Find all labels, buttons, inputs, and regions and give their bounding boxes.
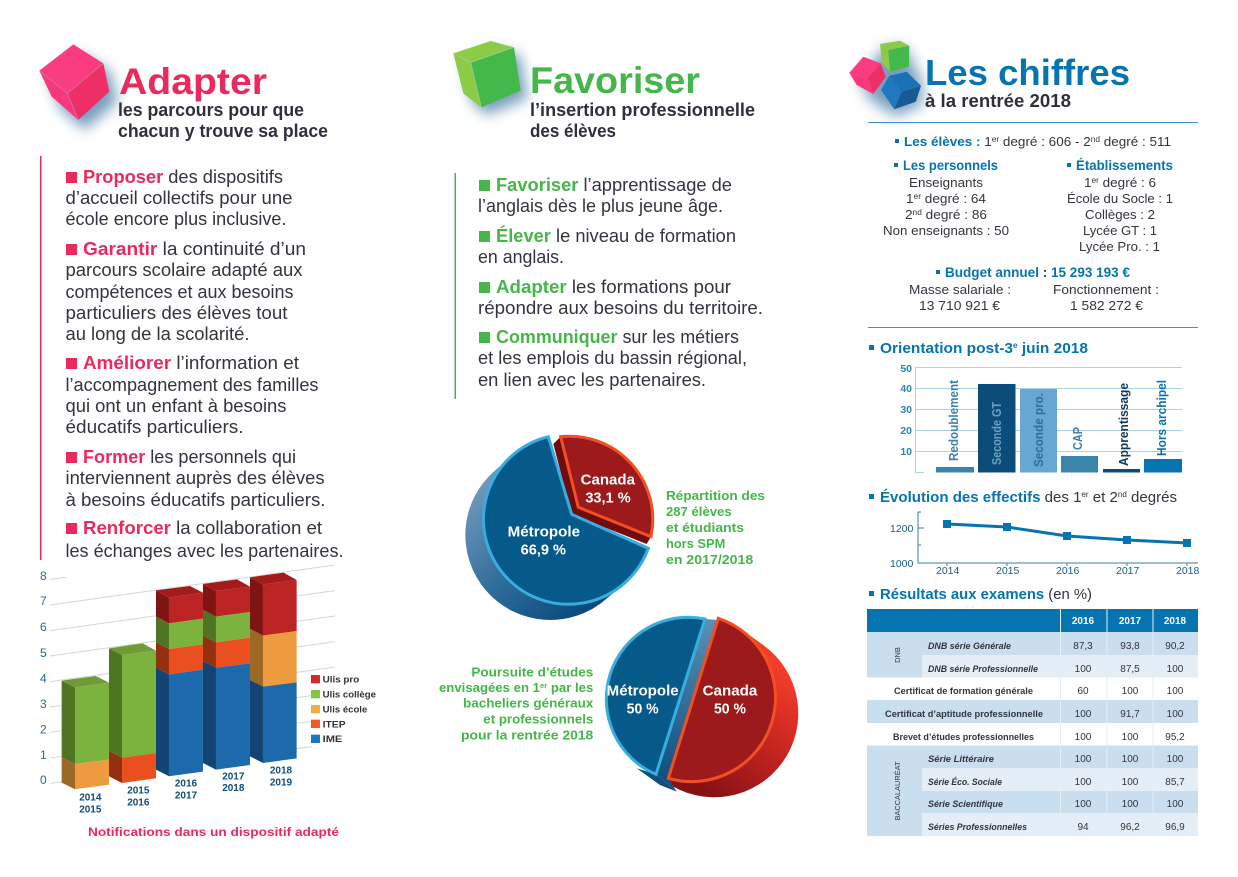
- legend: Ulis école: [323, 705, 367, 715]
- stat: budget annuel: 1 582 272 €: [1070, 298, 1144, 313]
- bar 2018-2019: [250, 573, 297, 763]
- line chart: effectifs: 1200: [890, 523, 914, 535]
- heading: Adapter: Adapter: [119, 61, 267, 102]
- icon: pink cube: [39, 44, 117, 130]
- table: résultats: 100: [1075, 777, 1092, 788]
- axis labels: [40, 569, 47, 787]
- table: résultats: 100: [1122, 732, 1139, 743]
- caption: poursuite d'études: par les: [547, 681, 593, 695]
- legend: ITEP: [323, 719, 346, 729]
- bar 2014-2015: [62, 676, 109, 789]
- caption: poursuite d'études: Poursuite d’études: [471, 666, 593, 680]
- stat: les personnels: degré : 64: [921, 191, 986, 206]
- bar 2016-2017: [156, 586, 203, 776]
- caption: poursuite d'études: envisagées en 1: [439, 681, 536, 695]
- table: résultats: 100: [1167, 709, 1184, 720]
- pie chart: Métropole 66,9 %, Canada 33,1 %: 66,9 %: [521, 542, 566, 559]
- table: résultats: Série Scientifique: [928, 799, 1004, 810]
- pie chart: Métropole 50 %, Canada 50 %: 50 %: [627, 700, 659, 717]
- subtitle: adapter: [118, 100, 328, 141]
- stat: budget annuel: Budget annuel : 15 293 193 €: [945, 264, 1130, 280]
- caption: répartition: [666, 489, 765, 567]
- stat: établissements: 1: [1084, 175, 1091, 190]
- year labels: 2018: [270, 766, 293, 777]
- text block: adapter actions: au long de la scolarité.: [66, 324, 250, 344]
- table: résultats: 87,3: [1073, 641, 1093, 652]
- table: résultats: 100: [1075, 754, 1092, 765]
- stat: budget annuel: Masse salariale :: [909, 282, 1011, 297]
- caption: répartition: hors SPM: [666, 537, 725, 551]
- stat: les élèves: nd: [1091, 135, 1100, 144]
- heading: orientation: Orientation post-3: [880, 340, 1009, 357]
- stat: budget annuel: Fonctionnement :: [1053, 282, 1159, 297]
- text block: favoriser actions: l’anglais dès le plus jeune âge.: [478, 196, 723, 216]
- subtitle: favoriser: l’insertion professionnelle: [530, 100, 755, 120]
- table: résultats: 60: [1077, 686, 1089, 697]
- year labels: 2017: [222, 772, 245, 783]
- text block: adapter actions: éducatifs particuliers.: [66, 417, 244, 437]
- text block: adapter actions: à besoins éducatifs particuliers.: [66, 490, 326, 510]
- text block: adapter actions: Garantir la continuité d’un: [83, 239, 306, 259]
- axis labels: 0: [40, 773, 47, 787]
- table: résultats: Série Littéraire: [928, 754, 995, 765]
- pie chart: Métropole 50 %, Canada 50 %: 50 %: [714, 700, 746, 717]
- axis labels: 6: [40, 620, 47, 634]
- table: résultats: 100: [1122, 686, 1139, 697]
- stat: les personnels: 1: [906, 191, 913, 206]
- text block: adapter actions: interviennent auprès des élèves: [66, 468, 324, 488]
- heading: évolution des effectifs: Évolution des effectifs des 1: [880, 489, 1081, 506]
- heading: évolution des effectifs: et 2: [1089, 489, 1118, 506]
- stat: établissements: Lycée Pro. : 1: [1079, 239, 1160, 254]
- table: résultats: 93,8: [1120, 641, 1140, 652]
- text block: adapter actions: l’accompagnement des familles: [66, 375, 318, 395]
- table: résultats: 100: [1167, 686, 1184, 697]
- table: résultats: 95,2: [1165, 732, 1185, 743]
- stat: budget annuel: 13 710 921 €: [919, 298, 1001, 313]
- stat: les personnels: nd: [913, 208, 922, 217]
- bar chart: orientation: 30: [900, 404, 912, 416]
- table: résultats: Certificat de formation générale: [894, 686, 1033, 697]
- icon: green cube: [453, 41, 527, 115]
- axis labels: 4: [40, 671, 47, 685]
- text block: favoriser actions: en anglais.: [478, 247, 564, 267]
- table: résultats: 100: [1122, 754, 1139, 765]
- stat: établissements: degré : 6: [1099, 175, 1156, 190]
- year labels: 2015: [127, 786, 150, 797]
- table: résultats: 96,2: [1120, 822, 1140, 833]
- caption: poursuite d'études: [439, 666, 593, 742]
- table: résultats: Série Éco. Sociale: [928, 777, 1003, 788]
- table: résultats: 100: [1167, 754, 1184, 765]
- stat: les personnels: er: [914, 192, 921, 201]
- table: résultats: Certificat d’aptitude professionnelle: [885, 709, 1043, 720]
- text block: adapter actions: parcours scolaire adapté aux: [66, 260, 302, 280]
- table: résultats: 100: [1075, 709, 1092, 720]
- stat: budget annuel: [909, 264, 1159, 313]
- stat: les personnels: degré : 86: [922, 207, 987, 222]
- legend: IME: [323, 734, 342, 744]
- caption: répartition: en 2017/2018: [666, 553, 753, 567]
- subtitle: favoriser: [530, 100, 755, 141]
- table: résultats: 100: [1075, 664, 1092, 675]
- line chart: effectifs: [890, 512, 1200, 577]
- year labels: 2015: [79, 805, 102, 816]
- text block: favoriser actions: [454, 173, 763, 399]
- heading: résultats aux examens: Résultats aux examens (en %): [880, 586, 1092, 603]
- stat: les personnels: 2: [905, 207, 912, 222]
- axis labels: 1: [40, 748, 47, 762]
- stat: établissements: er: [1092, 176, 1099, 185]
- legend: Ulis collège: [323, 690, 376, 700]
- stat: les personnels: [883, 157, 1009, 238]
- caption: poursuite d'études: er: [540, 681, 547, 690]
- table: résultats: BACCALAURÉAT: [893, 761, 902, 820]
- table: résultats: [867, 609, 1198, 836]
- table: résultats: 100: [1075, 732, 1092, 743]
- bar chart: orientation: 20: [900, 425, 912, 437]
- table: résultats: DNB série Générale: [928, 641, 1012, 652]
- line chart: effectifs: 2015: [996, 565, 1020, 577]
- year labels: 2019: [270, 778, 293, 789]
- stat: établissements: École du Socle : 1: [1067, 191, 1173, 206]
- bar chart: orientation: Apprentissage: [1117, 383, 1131, 466]
- year labels: 2016: [127, 798, 150, 809]
- stat: les personnels: Non enseignants : 50: [883, 223, 1009, 238]
- text block: adapter actions: Renforcer la collaboration et: [83, 518, 322, 538]
- text block: adapter actions: Former les personnels qui: [83, 447, 296, 467]
- bar chart: orientation: CAP: [1071, 427, 1085, 450]
- stat: établissements: Établissements: [1076, 157, 1173, 173]
- table: résultats: 94: [1077, 822, 1089, 833]
- table: résultats: 91,7: [1120, 709, 1140, 720]
- table: résultats: DNB: [893, 647, 902, 663]
- bar 2015-2016: [109, 643, 156, 783]
- axis labels: 5: [40, 646, 47, 660]
- table: résultats: 87,5: [1120, 664, 1140, 675]
- text block: adapter actions: Améliorer l’information et: [83, 353, 299, 373]
- pie chart: Métropole 66,9 %, Canada 33,1 %: [483, 420, 670, 604]
- legend: [311, 675, 376, 744]
- line chart: effectifs: 1000: [890, 558, 914, 570]
- bar chart: orientation: [900, 363, 1182, 472]
- legend: Ulis pro: [323, 675, 360, 685]
- text block: adapter actions: [40, 156, 344, 561]
- table: résultats: 100: [1167, 799, 1184, 810]
- axis labels: 7: [40, 594, 47, 608]
- bar chart: orientation: 10: [900, 446, 912, 458]
- text block: favoriser actions: en lien avec les partenaires.: [478, 370, 706, 390]
- bar chart: orientation: Seconde GT: [990, 402, 1004, 465]
- table: résultats: 2017: [1119, 616, 1142, 627]
- heading: évolution des effectifs: degrés: [1127, 489, 1177, 506]
- table: résultats: 100: [1167, 664, 1184, 675]
- table: résultats: 100: [1122, 799, 1139, 810]
- subtitle: adapter: chacun y trouve sa place: [118, 121, 328, 141]
- stat: établissements: [1067, 157, 1173, 254]
- pie chart: Métropole 50 %, Canada 50 %: [606, 617, 775, 792]
- text block: favoriser actions: Communiquer sur les métiers: [496, 327, 739, 347]
- text block: favoriser actions: et les emplois du bassin régional,: [478, 348, 747, 368]
- panel: favoriser: [439, 41, 775, 792]
- caption: répartition: Répartition des: [666, 489, 765, 503]
- table: résultats: Séries Professionnelles: [928, 822, 1027, 833]
- stat: les élèves: degré : 511: [1100, 134, 1171, 149]
- table: résultats: 96,9: [1165, 822, 1185, 833]
- pie chart: Métropole 50 %, Canada 50 %: Métropole: [607, 682, 679, 699]
- axis labels: 2: [40, 722, 47, 736]
- text block: adapter actions: école encore plus inclusive.: [66, 209, 286, 229]
- bar chart: orientation: Redoublement: [947, 379, 961, 461]
- text block: adapter actions: Proposer des dispositifs: [83, 167, 283, 187]
- bar chart: orientation: Seconde pro.: [1032, 393, 1046, 467]
- pie chart: Métropole 66,9 %, Canada 33,1 %: Métropole: [508, 524, 580, 541]
- year labels: 2017: [175, 791, 198, 802]
- stat: les personnels: Les personnels: [903, 157, 998, 173]
- year labels: 2016: [175, 779, 198, 790]
- stat: les élèves: Les élèves : 1: [904, 134, 991, 149]
- subtitle: à la rentrée 2018: à la rentrée 2018: [925, 91, 1071, 111]
- bar chart: orientation: 50: [900, 363, 912, 375]
- caption: poursuite d'études: et professionnels: [483, 712, 593, 726]
- line chart: effectifs: 2017: [1116, 565, 1140, 577]
- table: résultats: 90,2: [1165, 641, 1185, 652]
- line chart: effectifs: 2014: [936, 565, 960, 577]
- year labels: 2018: [222, 783, 245, 794]
- heading: Les chiffres: Les chiffres: [925, 52, 1130, 93]
- heading: orientation: e: [1013, 341, 1018, 350]
- axis labels: 3: [40, 697, 47, 711]
- chart title: Notifications dans un dispositif adapté: [88, 825, 339, 839]
- heading: orientation: [869, 340, 1088, 357]
- panel: les chiffres: [849, 41, 1200, 836]
- text block: adapter actions: qui ont un enfant à besoins: [66, 396, 286, 416]
- year labels: 2014: [79, 793, 102, 804]
- caption: répartition: et étudiants: [666, 521, 744, 535]
- text block: adapter actions: particuliers des élèves tout: [66, 303, 288, 323]
- text block: adapter actions: compétences et aux besoins: [66, 282, 294, 302]
- line chart: effectifs: 2018: [1176, 565, 1200, 577]
- pie chart: Métropole 50 %, Canada 50 %: Canada: [703, 682, 758, 699]
- stat: les élèves: degré : 606 - 2: [999, 134, 1091, 149]
- stat: établissements: Collèges : 2: [1085, 207, 1155, 222]
- pie chart: Métropole 66,9 %, Canada 33,1 %: Canada: [581, 471, 636, 488]
- stat: établissements: Lycée GT : 1: [1083, 223, 1157, 238]
- table: résultats: Brevet d’études professionnelles: [893, 732, 1034, 743]
- caption: poursuite d'études: bacheliers généraux: [463, 696, 593, 710]
- panel: adapter: [39, 44, 376, 839]
- year labels: [79, 766, 293, 816]
- table: résultats: 2016: [1072, 616, 1095, 627]
- line chart: effectifs: 2016: [1056, 565, 1080, 577]
- caption: poursuite d'études: pour la rentrée 2018: [461, 728, 593, 742]
- text block: favoriser actions: Adapter les formations pour: [496, 277, 731, 297]
- bar chart: orientation: Hors archipel: [1155, 380, 1169, 456]
- bar 2017-2018: [203, 579, 250, 770]
- subtitle: adapter: les parcours pour que: [118, 100, 304, 120]
- table: résultats: 100: [1075, 799, 1092, 810]
- stat: les élèves: [895, 134, 1171, 149]
- text block: adapter actions: d’accueil collectifs pour une: [66, 188, 292, 208]
- text block: adapter actions: les échanges avec les partenaires.: [66, 541, 344, 561]
- icon: three cubes: [849, 41, 922, 116]
- caption: répartition: 287 élèves: [666, 505, 732, 519]
- heading: évolution des effectifs: er: [1081, 490, 1089, 499]
- text block: favoriser actions: Favoriser l’apprentissage de: [496, 175, 732, 195]
- heading: orientation: juin 2018: [1018, 340, 1088, 357]
- table: résultats: 2018: [1164, 616, 1187, 627]
- table: résultats: 100: [1122, 777, 1139, 788]
- pie chart: Métropole 66,9 %, Canada 33,1 %: 33,1 %: [585, 490, 631, 507]
- heading: évolution des effectifs: [869, 489, 1177, 506]
- axis labels: 8: [40, 569, 47, 583]
- text block: favoriser actions: Élever le niveau de formation: [496, 225, 736, 246]
- stat: les personnels: Enseignants: [909, 175, 984, 190]
- table: résultats: 85,7: [1165, 777, 1185, 788]
- chart: 3D stacked bars, notifications: [40, 565, 376, 839]
- heading: évolution des effectifs: nd: [1118, 490, 1127, 499]
- heading: Favoriser: Favoriser: [530, 60, 700, 101]
- text block: favoriser actions: répondre aux besoins du territoire.: [478, 298, 763, 318]
- table: résultats: DNB série Professionnelle: [928, 664, 1039, 675]
- bar chart: orientation: 40: [900, 383, 912, 395]
- stat: les élèves: er: [992, 135, 1000, 144]
- subtitle: favoriser: des élèves: [530, 121, 616, 141]
